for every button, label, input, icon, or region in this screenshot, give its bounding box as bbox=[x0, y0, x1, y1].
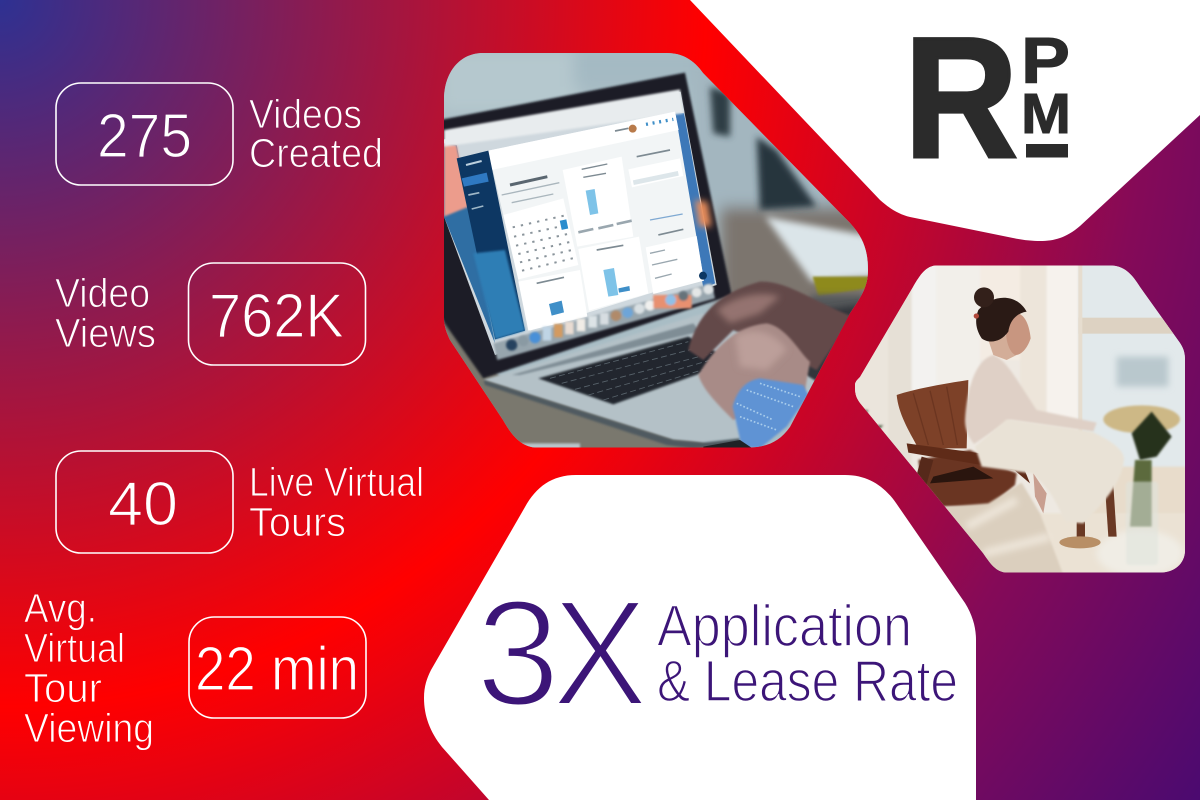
text: application and lease rate: & Lease Rate bbox=[657, 649, 958, 714]
stat: videos created: Videos bbox=[249, 91, 362, 137]
flowers bbox=[1103, 405, 1180, 433]
floor bbox=[1041, 514, 1185, 572]
glass vase bbox=[1126, 482, 1158, 565]
plant at left bbox=[864, 408, 884, 430]
stat: average virtual tour viewing: 22 min bbox=[195, 635, 359, 704]
stat: 3X headline: 3 bbox=[476, 568, 560, 737]
armchair bbox=[897, 380, 1117, 548]
menu bar bbox=[444, 89, 683, 147]
armchair seat base bbox=[918, 450, 1017, 507]
stat: average virtual tour viewing: Virtual bbox=[24, 625, 125, 671]
panel: 3X headline shape bbox=[424, 475, 976, 800]
foreground cushion bbox=[940, 483, 1063, 575]
stat: video views bbox=[55, 263, 366, 365]
user avatar and toolbar bbox=[629, 125, 637, 133]
text: application and lease rate bbox=[657, 594, 958, 714]
logo: RPM: P bbox=[1021, 24, 1070, 97]
stat: video views: Video bbox=[55, 270, 150, 316]
woman: trousers bbox=[975, 419, 1124, 523]
laptop base bbox=[483, 313, 820, 443]
armrest bbox=[907, 443, 1030, 483]
text: application and lease rate: Application bbox=[657, 594, 912, 659]
stat: 3X headline bbox=[476, 568, 648, 737]
stat: live virtual tours: Live Virtual bbox=[249, 459, 424, 505]
calendar card bbox=[503, 198, 578, 279]
reports card bbox=[646, 236, 704, 294]
chart card bottom bbox=[578, 237, 648, 311]
stat: videos created bbox=[56, 83, 383, 185]
photo: woman sitting in armchair bbox=[850, 260, 1200, 580]
panel: logo shape bbox=[690, 0, 1200, 241]
photo: laptop with dashboard and typing hands bbox=[440, 50, 873, 453]
stat: video views: 762K bbox=[209, 282, 344, 351]
window sill and wall bbox=[1094, 466, 1185, 514]
woman: top bbox=[965, 355, 1097, 444]
stat: average virtual tour viewing bbox=[24, 585, 366, 751]
app window bbox=[488, 112, 703, 331]
stat: videos created: 275 bbox=[97, 102, 192, 171]
woman: neck and face bbox=[988, 335, 1017, 360]
app sidebar bbox=[457, 151, 525, 339]
stat: videos created: Created bbox=[249, 130, 383, 176]
dark area behind hands bbox=[798, 303, 856, 410]
screen wallpaper bbox=[444, 92, 717, 355]
stat: live virtual tours: Tours bbox=[249, 499, 346, 545]
stat: 3X headline: X bbox=[552, 568, 648, 737]
videos card bbox=[518, 270, 587, 331]
back hand bbox=[688, 282, 853, 370]
recommendation card bbox=[628, 158, 683, 187]
woman: hair bbox=[976, 298, 1027, 342]
stat: live virtual tours: 40 bbox=[108, 470, 178, 539]
stat: video views: Views bbox=[55, 310, 156, 356]
chart card top bbox=[563, 157, 633, 247]
dock bbox=[493, 283, 715, 360]
table below laptop bbox=[444, 321, 704, 448]
logo: RPM: R bbox=[904, 2, 1018, 194]
armchair back bbox=[897, 380, 968, 448]
shirt sleeve bbox=[733, 378, 808, 448]
stat: average virtual tour viewing: Tour bbox=[24, 665, 102, 711]
keyboard bbox=[538, 337, 733, 404]
stat: live virtual tours bbox=[56, 451, 424, 553]
front hand bbox=[698, 323, 810, 420]
dashboard greeting bbox=[510, 177, 547, 185]
stat: average virtual tour viewing: Viewing bbox=[24, 705, 154, 751]
table foreground bbox=[703, 440, 752, 448]
window bbox=[1082, 266, 1185, 466]
stat: average virtual tour viewing: Avg. bbox=[24, 585, 97, 631]
logo: RPM: M bbox=[1021, 82, 1071, 146]
laptop lid bbox=[440, 73, 732, 378]
curtains bbox=[855, 266, 1077, 467]
